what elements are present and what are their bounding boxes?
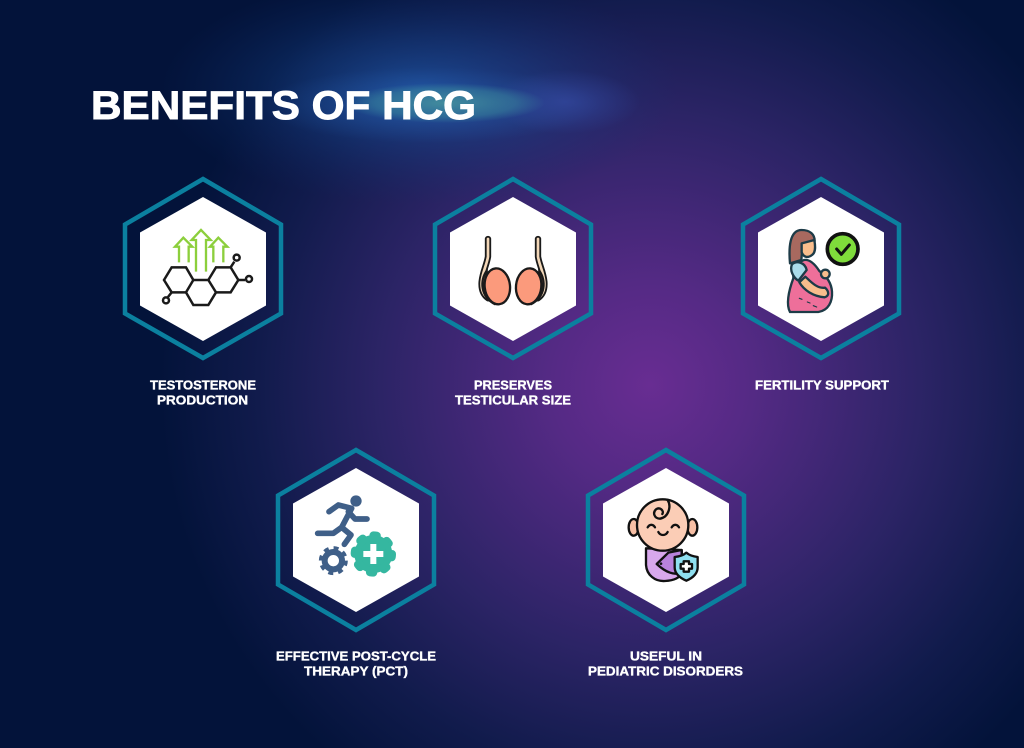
hexagon frame	[435, 179, 591, 358]
label: PRODUCTION	[157, 394, 248, 408]
label: FERTILITY SUPPORT	[755, 378, 889, 392]
label: PRESERVES	[474, 378, 552, 392]
panel: fertility support	[743, 179, 899, 392]
hexagon tile	[450, 197, 576, 341]
hexagon frame	[743, 179, 899, 358]
icon: molecule with arrows	[163, 230, 252, 305]
hexagon tile	[758, 197, 884, 341]
label	[150, 378, 256, 408]
icon: baby with shield	[629, 499, 698, 581]
label: USEFUL IN	[630, 650, 702, 664]
panel: effective post-cycle therapy	[276, 450, 436, 678]
hexagon frame	[125, 179, 281, 358]
icon: testes	[482, 239, 544, 306]
label: TESTICULAR SIZE	[455, 394, 571, 408]
label: THERAPY (PCT)	[304, 664, 408, 678]
label: PEDIATRIC DISORDERS	[588, 664, 743, 678]
title: BENEFITS OF HCG	[91, 84, 476, 128]
panel: useful in pediatric disorders	[588, 450, 744, 678]
label	[455, 378, 571, 408]
label: EFFECTIVE POST-CYCLE	[276, 650, 436, 664]
label	[276, 650, 436, 678]
hexagon tile	[140, 197, 266, 341]
hexagon frame	[588, 450, 744, 630]
label: TESTOSTERONE	[150, 378, 256, 392]
hexagon frame	[278, 450, 434, 630]
panel: preserves testicular size	[435, 179, 591, 408]
label	[588, 650, 743, 678]
hexagon tile	[293, 468, 419, 612]
icon: runner and gears	[318, 495, 392, 573]
icon: pregnant woman with check mark	[788, 230, 858, 312]
hexagon tile	[603, 468, 729, 612]
panel: testosterone production	[125, 179, 281, 408]
